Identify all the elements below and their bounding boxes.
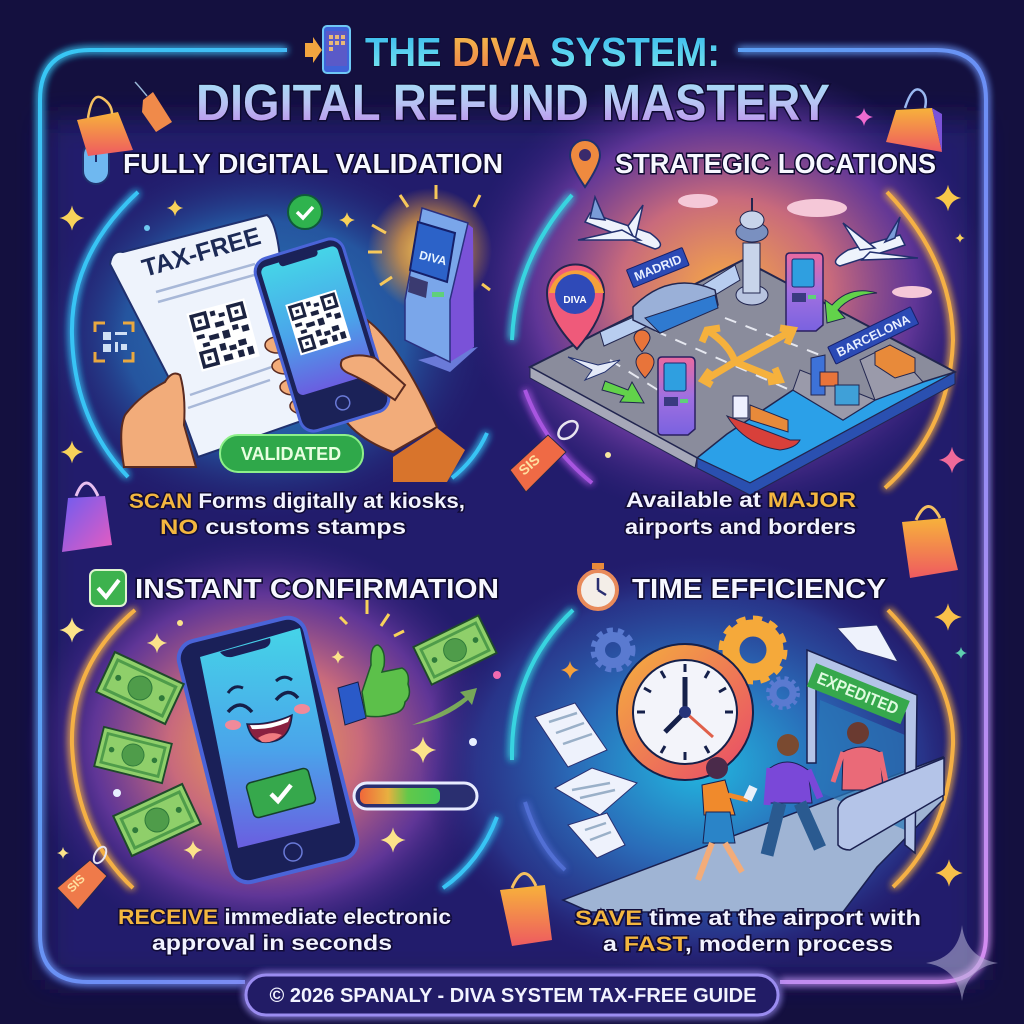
footer pill: © 2026 SPANALY - DIVA SYSTEM TAX-FREE GUIDE (270, 985, 756, 1007)
containers (811, 345, 915, 405)
paper lines (549, 713, 615, 840)
footer pill (246, 975, 778, 1015)
icon: tag top left (135, 82, 172, 132)
icon: check badge (288, 195, 322, 229)
large clock (617, 644, 753, 780)
neon arcs (72, 610, 497, 888)
icon: shopping bag left middle (62, 483, 112, 552)
orange direction arrows (702, 328, 793, 385)
decorative shopping bags (62, 82, 958, 946)
icon: stopwatch (579, 563, 617, 609)
neon arcs (72, 192, 487, 478)
body text: RECEIVE immediate electronic (118, 906, 451, 929)
icon: shopping bag bottom (500, 873, 552, 946)
validated badge (220, 435, 363, 472)
smartphone with QR code (252, 235, 392, 435)
kiosk glow rays (368, 185, 492, 312)
price tag: SIS (64, 872, 88, 895)
heading: FULLY DIGITAL VALIDATION (123, 148, 503, 179)
price tag (57, 845, 109, 910)
small plane (568, 357, 620, 380)
pink sparkle (855, 108, 873, 126)
stars (59, 200, 355, 463)
smartphone with smiling face (175, 614, 361, 886)
body text (129, 490, 465, 539)
green arrows (602, 291, 877, 403)
stars (561, 603, 967, 887)
price tag: SIS (515, 451, 543, 478)
panel: fully digital validation (59, 142, 503, 539)
airport terminal (600, 265, 740, 346)
icon: shopping bag right middle (902, 506, 958, 578)
control tower (736, 198, 768, 305)
neon arcs (512, 192, 953, 488)
price tag (510, 418, 581, 492)
city sign: Madrid: MADRID (632, 252, 684, 284)
thumb (341, 355, 405, 400)
title: DIGITAL REFUND MASTERY (196, 74, 830, 131)
airport walkway (563, 757, 943, 912)
left hand (121, 374, 196, 467)
body text (118, 906, 451, 955)
heading: INSTANT CONFIRMATION (135, 573, 499, 604)
map platform (530, 260, 955, 495)
runway marks (610, 318, 820, 410)
sparkles (57, 617, 501, 860)
body text: NO customs stamps (160, 516, 406, 539)
travellers (698, 722, 944, 880)
heading: STRATEGIC LOCATIONS (615, 148, 936, 179)
body text: a FAST , modern process (603, 933, 893, 956)
green trail arrow (412, 688, 477, 725)
icon: phone with arrow (305, 26, 350, 73)
DIVA kiosk (405, 208, 478, 372)
watermark sparkle (926, 925, 998, 1001)
body text (575, 907, 921, 956)
gears (722, 619, 784, 681)
airplanes (578, 197, 660, 249)
kiosks (786, 253, 823, 331)
thumbs up (338, 645, 409, 725)
woman walking (698, 757, 757, 880)
small map pins (634, 330, 654, 378)
fingers behind phone (265, 337, 316, 414)
expedited gate: EXPEDITED (814, 669, 901, 718)
panel: strategic locations (510, 140, 965, 539)
gate attendant (833, 722, 886, 790)
cargo ship (727, 396, 800, 450)
tax-free receipt: TAX-FREE (139, 222, 264, 283)
flying papers (535, 625, 898, 858)
DIVA pin (547, 264, 604, 349)
body text: Available at MAJOR (626, 489, 856, 512)
icon: shopping bag top left (77, 97, 133, 156)
clouds (678, 194, 932, 298)
city sign: Barcelona: BARCELONA (834, 312, 912, 360)
progress bar (354, 783, 477, 809)
title: THE DIVA SYSTEM: (365, 29, 720, 75)
man walking (767, 734, 820, 855)
green bills (94, 615, 497, 856)
panel: instant confirmation (57, 570, 501, 955)
icon: mouse (83, 142, 109, 184)
tax-free receipt (110, 215, 310, 457)
body text: airports and borders (625, 516, 856, 539)
body text (625, 489, 856, 539)
icon: shopping bag top right (886, 89, 942, 152)
heading: TIME EFFICIENCY (632, 573, 886, 604)
panel: time efficiency (512, 563, 967, 956)
icon: scan frame (95, 323, 133, 361)
city sign: Madrid (626, 247, 689, 288)
neon arcs (512, 610, 953, 887)
stars (605, 185, 965, 473)
body text: SCAN Forms digitally at kiosks, (129, 490, 465, 513)
barrier (838, 758, 944, 850)
expedited gate (807, 650, 917, 853)
icon: location pin (570, 140, 600, 187)
title (196, 26, 830, 131)
body text: approval in seconds (152, 932, 392, 955)
icon: green check box (90, 570, 126, 606)
DIVA pin: DIVA (563, 295, 587, 306)
sleeve (393, 428, 465, 482)
palm (345, 320, 437, 452)
validated badge: VALIDATED (241, 444, 341, 464)
thumb rays (340, 600, 404, 636)
DIVA kiosk: DIVA (418, 248, 448, 268)
body text: SAVE time at the airport with (575, 907, 921, 930)
